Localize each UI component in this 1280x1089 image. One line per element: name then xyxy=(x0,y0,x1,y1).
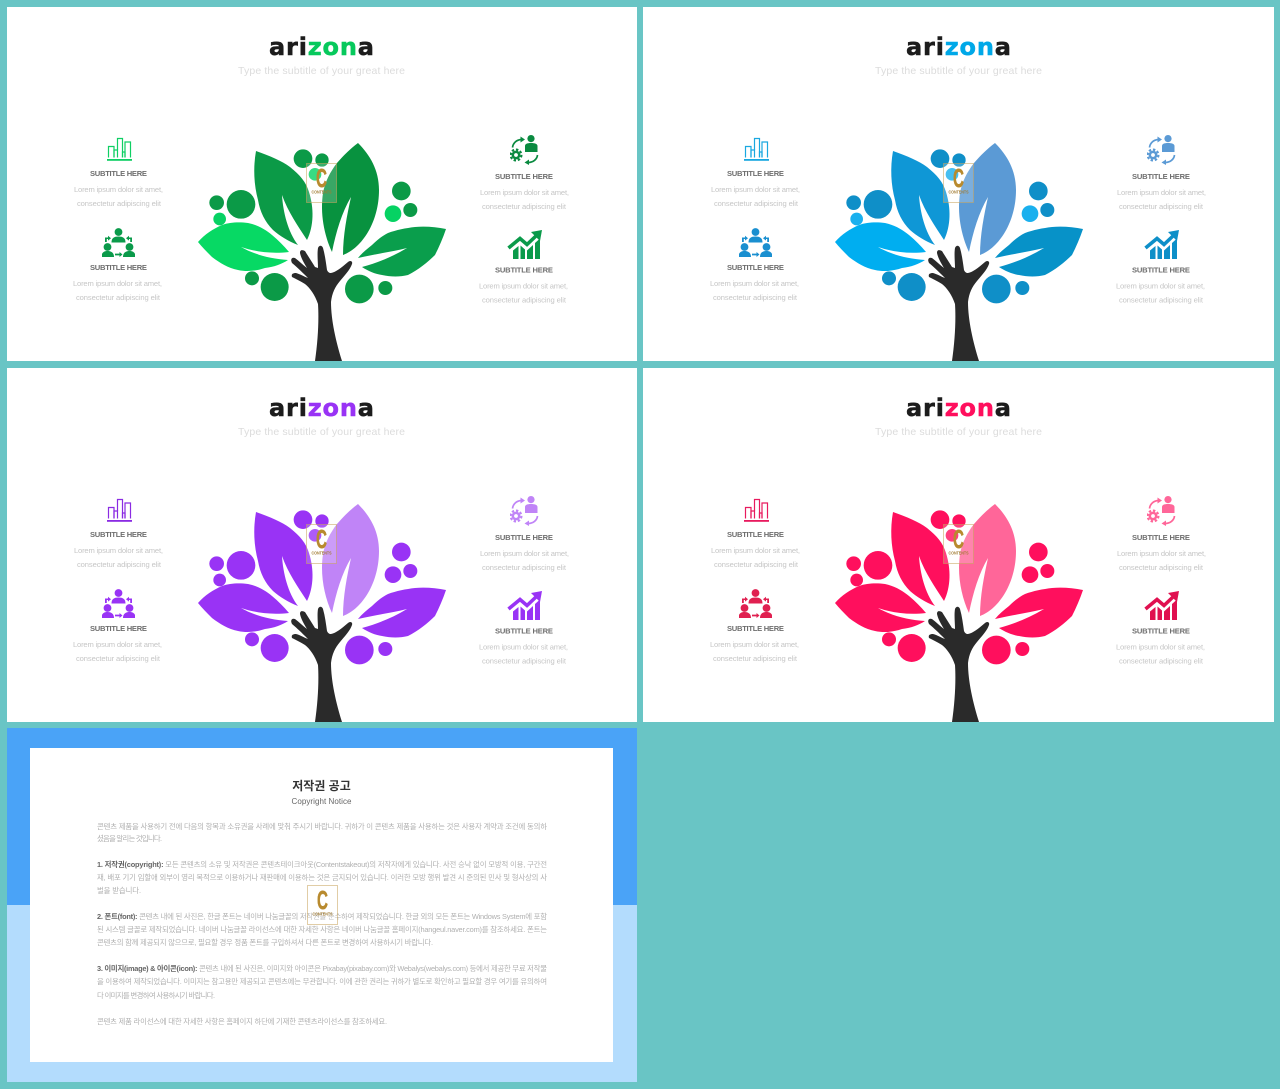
icon: bar chart xyxy=(744,138,769,161)
text block: right top xyxy=(480,533,569,572)
title: arizona xyxy=(906,394,1011,422)
text block: font: 콘텐츠의 함께 제공되지 않으므로, 필요할 경우 정품 폰트를 구입하셔서 다른 폰트로 변경하여 사용하시기 바랍니다. xyxy=(97,938,433,947)
text block: left top: Lorem ipsum dolor sit amet, xyxy=(74,546,163,555)
text block: right top: consectetur adipiscing elit xyxy=(482,563,567,572)
text block: right top xyxy=(480,172,569,211)
text block: left top xyxy=(74,169,163,208)
text block: right top xyxy=(1117,172,1206,211)
text block: intro xyxy=(97,822,547,843)
subtitle: Type the subtitle of your great here xyxy=(875,426,1042,438)
panel: purple tree xyxy=(7,368,637,722)
text block: left top: consectetur adipiscing elit xyxy=(77,199,162,208)
icon: team xyxy=(102,228,136,257)
icon: team xyxy=(738,228,772,257)
text block: right bottom: SUBTITLE HERE xyxy=(495,626,553,636)
text block: intro: 콘텐츠 제품을 사용하기 전에 다음의 항목과 소유권을 사례에 맞춰 주시기 바랍니다. 귀하가 이 콘텐츠 제품을 사용하는 것은 사용자 계약과 조건에 동의하 xyxy=(97,822,547,831)
text block: right bottom xyxy=(479,266,568,304)
text block: left bottom: SUBTITLE HERE xyxy=(90,263,147,272)
text block: right bottom: Lorem ipsum dolor sit amet, xyxy=(1116,642,1205,652)
text block: image and icon: 다 이미지를 변경하여 사용하시기 바랍니다. xyxy=(97,991,215,1000)
text block: left bottom: consectetur adipiscing elit xyxy=(76,293,161,302)
text block: left top: consectetur adipiscing elit xyxy=(714,199,799,208)
icon: cycle xyxy=(511,496,538,526)
text block: left bottom: Lorem ipsum dolor sit amet, xyxy=(73,640,162,649)
text block: left bottom xyxy=(710,263,799,302)
title: arizona xyxy=(269,33,374,61)
subtitle: Type the subtitle of your great here xyxy=(875,65,1042,77)
text block: left bottom xyxy=(710,624,799,663)
text block: left bottom xyxy=(73,263,162,302)
title: arizona xyxy=(906,33,1011,61)
text block: left top: Lorem ipsum dolor sit amet, xyxy=(711,546,800,555)
watermark xyxy=(306,163,336,202)
panel: pink tree xyxy=(643,368,1274,722)
icon: cycle xyxy=(1148,135,1174,165)
text block: right bottom xyxy=(1116,266,1205,304)
text block: left top xyxy=(711,530,800,569)
text block: left top: consectetur adipiscing elit xyxy=(77,560,162,569)
text block: font xyxy=(97,912,547,947)
icon: bar chart xyxy=(107,500,132,522)
icon: bar chart xyxy=(107,138,132,161)
text block: intro: 셨음을 알리는 것입니다. xyxy=(97,834,162,843)
icon: team xyxy=(102,589,136,618)
tree illustration xyxy=(198,143,446,361)
icon: growth xyxy=(1146,230,1179,259)
text block: left top: Lorem ipsum dolor sit amet, xyxy=(74,185,163,194)
text block: right top: Lorem ipsum dolor sit amet, xyxy=(1117,188,1206,197)
text block: copyright xyxy=(97,860,547,895)
text block: right bottom: SUBTITLE HERE xyxy=(1132,626,1190,636)
watermark xyxy=(306,524,336,564)
text block: left top xyxy=(711,169,800,208)
text block: right top: Lorem ipsum dolor sit amet, xyxy=(480,188,569,197)
text block: right top xyxy=(1117,533,1206,572)
watermark xyxy=(944,524,974,564)
text block: copyright: 1. 저작권(copyright): 모든 콘텐츠의 소유 및 저작권은 콘텐츠테이크아웃(Contentstakeout)의 저작자에게 있습니다. 사전 승낙 없이 모방적 이용, 구간전 xyxy=(97,860,547,869)
text block: image and icon: 을 이용하여 제작되었습니다. 이미지는 참고용만 제공되고 콘텐츠에는 무관합니다. 이에 관한 권리는 귀하가 별도로 확인하고 필요할 경우 여기를 유의하여 xyxy=(97,977,547,986)
icon: bar chart xyxy=(744,500,769,522)
subtitle: Type the subtitle of your great here xyxy=(238,426,405,438)
text block: right top: SUBTITLE HERE xyxy=(495,172,553,181)
icon: cycle xyxy=(1148,496,1174,526)
watermark xyxy=(308,885,338,924)
text block: image and icon: 3. 이미지(image) & 아이콘(icon): 콘텐츠 내에 된 사진은, 이미지와 아이콘은 Pixabay(pixabay.com)와 Webalys(webalys.com) 등에서 제공한 무료 저작물 xyxy=(97,964,547,973)
text block: left bottom: SUBTITLE HERE xyxy=(727,263,784,272)
text block: left bottom: SUBTITLE HERE xyxy=(727,624,784,633)
text block: left bottom: SUBTITLE HERE xyxy=(90,624,147,633)
text block: right bottom: consectetur adipiscing elit xyxy=(482,656,567,666)
text block: right bottom: Lorem ipsum dolor sit amet, xyxy=(479,642,568,652)
text block: right bottom: consectetur adipiscing elit xyxy=(1119,296,1204,304)
text block: right bottom xyxy=(1116,626,1205,666)
heading: 저작권 공고 xyxy=(292,778,351,793)
icon: cycle xyxy=(511,135,538,165)
text block: copyright: 벌을 받습니다. xyxy=(97,886,141,895)
text block: left top: SUBTITLE HERE xyxy=(727,169,784,178)
icon: growth xyxy=(508,230,542,259)
text block: right bottom: SUBTITLE HERE xyxy=(495,266,553,274)
title: arizona xyxy=(269,394,374,422)
text block: closing: 콘텐츠 제품 라이선스에 대한 자세한 사항은 홈페이지 하단에 기재한 콘텐츠라이선스를 참조하세요. xyxy=(97,1017,387,1026)
text block: right bottom: Lorem ipsum dolor sit amet, xyxy=(1116,282,1205,290)
panel: green tree xyxy=(7,7,637,361)
icon: growth xyxy=(508,591,542,620)
text block: right top: consectetur adipiscing elit xyxy=(482,202,567,211)
text block: right bottom: consectetur adipiscing elit xyxy=(482,296,567,304)
text block: right top: SUBTITLE HERE xyxy=(1132,533,1190,542)
icon: growth xyxy=(1146,591,1179,620)
text block: left bottom: consectetur adipiscing elit xyxy=(713,293,798,302)
text block: font: 된 시스템 글꼴로 제작되었습니다. 네이버 나눔글꼴 라이선스에 대한 자세한 사항은 네이버 나눔글꼴 홈페이지(hangeul.naver.com)를 참조하세요. 폰트는 xyxy=(97,925,547,934)
text block: left top xyxy=(74,530,163,569)
text block: left top: Lorem ipsum dolor sit amet, xyxy=(711,185,800,194)
text block: left bottom: consectetur adipiscing elit xyxy=(713,654,798,663)
text block: right top: Lorem ipsum dolor sit amet, xyxy=(480,549,569,558)
text block: left top: SUBTITLE HERE xyxy=(90,169,147,178)
text block: right bottom: Lorem ipsum dolor sit amet, xyxy=(479,282,568,290)
watermark xyxy=(944,163,974,202)
text block: right top: SUBTITLE HERE xyxy=(1132,172,1190,181)
text block: right bottom: consectetur adipiscing elit xyxy=(1119,656,1204,666)
text block: right top: consectetur adipiscing elit xyxy=(1119,202,1204,211)
text block: right top: consectetur adipiscing elit xyxy=(1119,563,1204,572)
text block: right top: SUBTITLE HERE xyxy=(495,533,553,542)
text block: left top: SUBTITLE HERE xyxy=(727,530,784,539)
tree illustration xyxy=(835,143,1083,361)
text block: left bottom: consectetur adipiscing elit xyxy=(76,654,161,663)
panel: blue tree xyxy=(643,7,1274,361)
text block: image and icon xyxy=(97,964,547,1000)
subheading: Copyright Notice xyxy=(292,797,352,806)
text block: left bottom: Lorem ipsum dolor sit amet, xyxy=(73,279,162,288)
text block: left bottom: Lorem ipsum dolor sit amet, xyxy=(710,279,799,288)
panel: copyright notice xyxy=(7,728,637,1082)
tree illustration xyxy=(198,504,446,722)
text block: left bottom: Lorem ipsum dolor sit amet, xyxy=(710,640,799,649)
subtitle: Type the subtitle of your great here xyxy=(238,65,405,77)
text block: right top: Lorem ipsum dolor sit amet, xyxy=(1117,549,1206,558)
tree illustration xyxy=(835,504,1083,722)
text block: left top: consectetur adipiscing elit xyxy=(714,560,799,569)
text block: font: 2. 폰트(font): 콘텐츠 내에 된 사진은, 한글 폰트는 네이버 나눔글꼴의 저작권을 준수하여 제작되었습니다. 한글 외의 모든 폰트는 Windows System에 포함 xyxy=(97,912,547,921)
text block: left top: SUBTITLE HERE xyxy=(90,530,147,539)
text block: left bottom xyxy=(73,624,162,663)
text block: copyright: 재, 배포 기기 임할애 외부이 영리 목적으로 이용하거나 재판매에 이용하는 것은 금지되어 있습니다. 이러한 모방 행위 발견 시 준의된 민사 및 형사상의 사 xyxy=(97,873,547,882)
icon: team xyxy=(738,589,772,618)
text block: right bottom: SUBTITLE HERE xyxy=(1132,266,1190,274)
text block: right bottom xyxy=(479,626,568,666)
